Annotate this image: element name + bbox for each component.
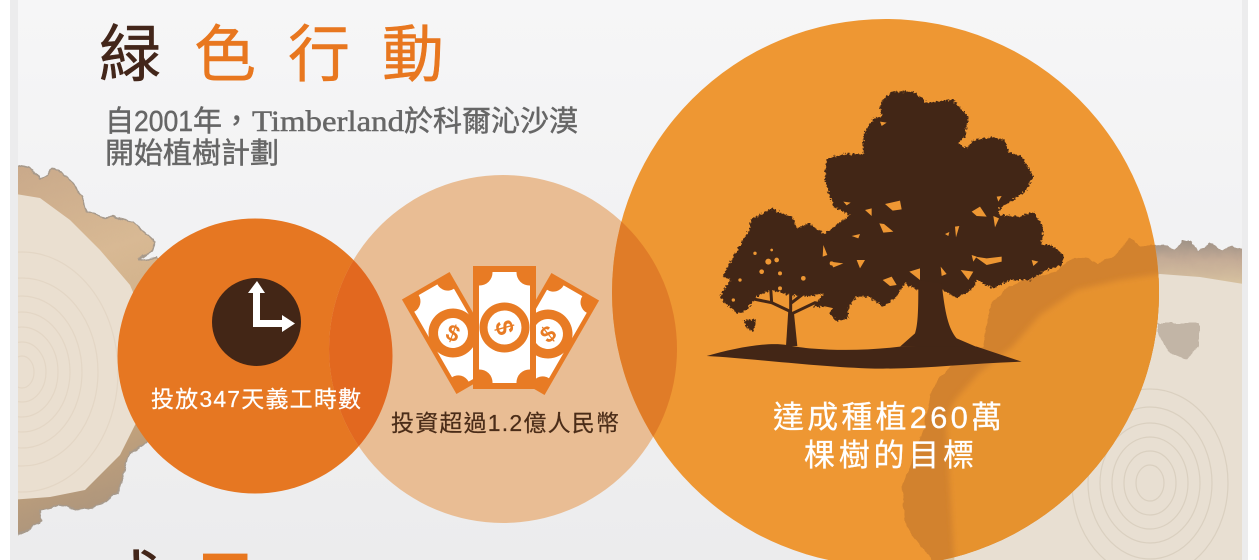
icon: clock	[212, 278, 301, 366]
circle: volunteer hours	[118, 218, 392, 494]
left banknote	[402, 272, 504, 394]
label: tree target: 達成種植260萬	[773, 400, 1002, 435]
label: tree target	[773, 400, 1002, 473]
right banknote: $	[535, 320, 561, 348]
centre banknote: $	[489, 317, 519, 338]
subtitle: Timberland	[252, 105, 404, 138]
subtitle: 自	[105, 105, 134, 138]
subtitle: 2001	[134, 106, 193, 138]
circle: tree target	[612, 19, 1159, 560]
left banknote: $	[443, 319, 464, 347]
canopy gaps	[732, 122, 1038, 302]
label: investment: 投資超過1.2億人民幣	[391, 410, 619, 436]
label: tree target: 棵樹的目標	[804, 438, 974, 473]
next section heading, cut off by the page edge	[100, 547, 256, 560]
icon: trees on a hill	[707, 92, 1063, 369]
title: 色	[194, 21, 256, 90]
centre banknote	[473, 266, 536, 389]
ground	[707, 344, 1022, 369]
subtitle: 於科爾沁沙漠	[404, 105, 578, 138]
circle: investment	[329, 175, 677, 523]
right banknote	[497, 273, 599, 395]
wood slice: left	[18, 165, 158, 536]
tree canopies	[720, 92, 1063, 322]
title: 動	[382, 21, 444, 90]
label: volunteer hours: 投放347天義工時數	[151, 386, 361, 412]
icon: banknotes	[402, 266, 599, 395]
title: 行	[288, 21, 350, 90]
title: 緑	[99, 4, 161, 94]
circle overlap: hours and investment	[329, 260, 392, 446]
trunks and branches	[786, 280, 980, 348]
subtitle: 開始植樹計劃	[105, 137, 279, 170]
title	[99, 4, 444, 94]
wood slice: right	[943, 240, 1242, 560]
subtitle	[105, 105, 578, 170]
subtitle: 年，	[193, 105, 251, 138]
small leaf cluster	[743, 319, 756, 332]
